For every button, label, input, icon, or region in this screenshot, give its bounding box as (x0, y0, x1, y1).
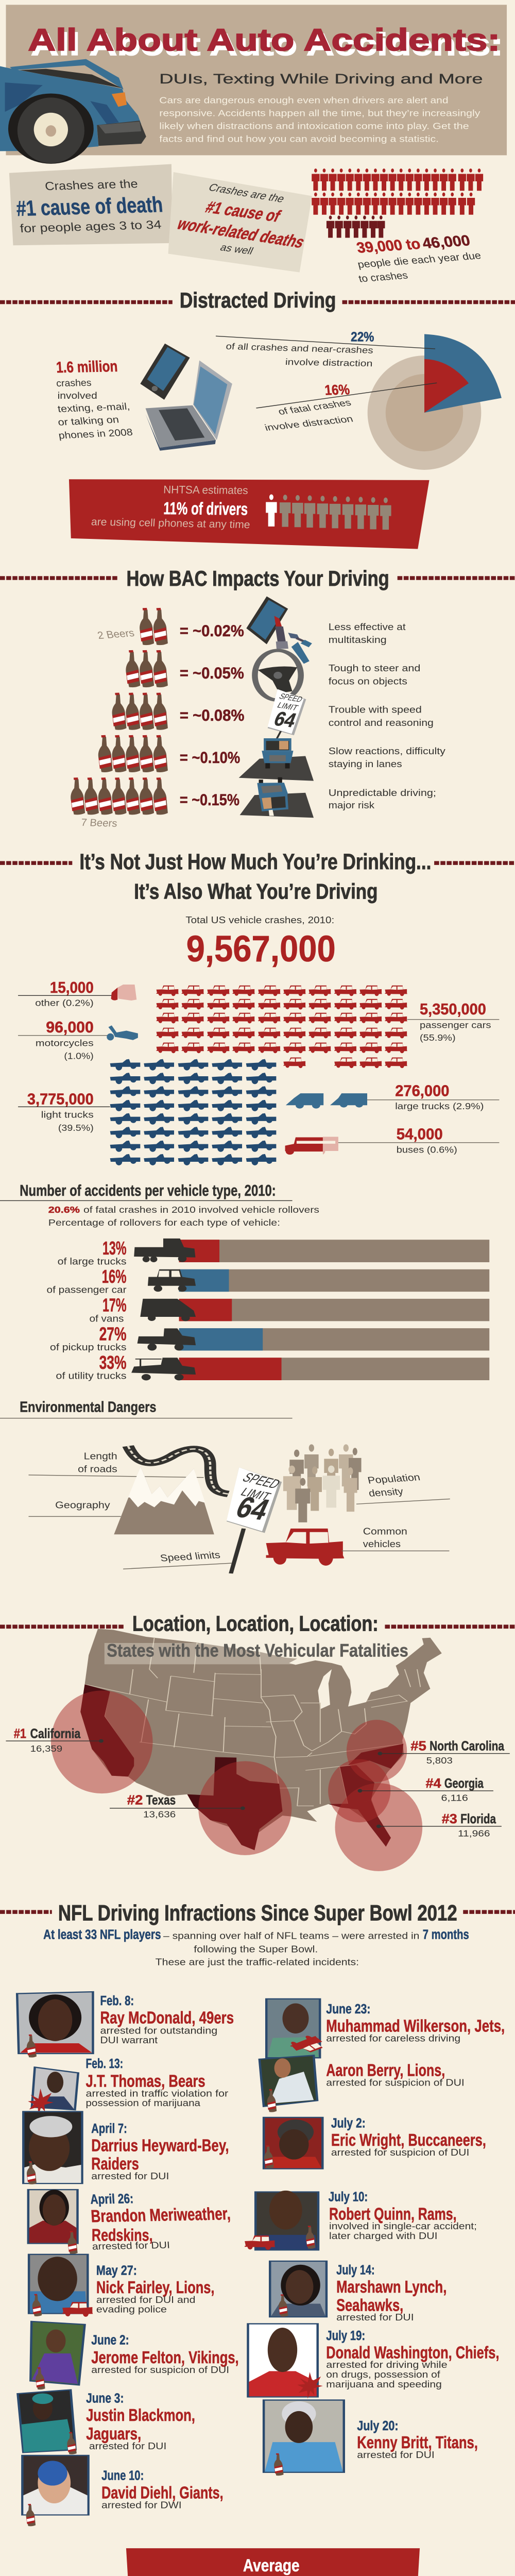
player: Brandon Meriweather (28, 2190, 231, 2254)
effects list: Trouble with speed (329, 704, 422, 715)
section: averages and prevention (0, 2548, 515, 2576)
callout: number one cause of work-related deaths: #1 cause of (203, 198, 284, 225)
player: Justin Blackmon: June 3: (86, 2391, 124, 2406)
BAC values: = ~0.08% (180, 706, 244, 724)
section: vehicle type accidents: 13% (102, 1238, 127, 1259)
player: Jerome Felton: June 2: (91, 2333, 129, 2348)
callout: number one cause of death: for people ages 3 to 34 (20, 218, 162, 235)
callout: average incidents (126, 2548, 420, 2576)
statistic: 22 percent: of all crashes and near-crashes (226, 342, 374, 355)
player: Darrius Heyward-Bey (23, 2112, 229, 2184)
statistic: 16 percent (263, 381, 354, 433)
player: Donald Washington: on drugs, possession of (326, 2369, 440, 2380)
label: Texas: Texas (146, 1793, 176, 1807)
player: Jerome Felton: arrested for suspicion of DUI (91, 2364, 229, 2375)
label: population density (356, 1471, 450, 1504)
label: North Carolina (377, 1739, 510, 1766)
statistic: 1.6 million: or talking on (57, 414, 119, 428)
player: Darrius Heyward-Bey: arrested for DUI (91, 2171, 169, 2181)
chart: distraction radial pie (216, 334, 502, 470)
label: California: 16,359 (30, 1743, 62, 1754)
icon: speed limit sign: LIMIT (238, 1485, 274, 1503)
player: Donald Washington: marijuana and speeding (326, 2379, 442, 2389)
section: NFL players part two: Justin Blackmon, (86, 2405, 195, 2425)
player: Ray McDonald (17, 1992, 234, 2058)
section: vehicle type accidents (0, 1125, 499, 1381)
statistic: 16 percent: involve distraction (263, 414, 354, 433)
section: header banner: #1 cause of death (15, 193, 164, 221)
label: common vehicles (341, 1526, 449, 1551)
player: Donald Washington (248, 2324, 499, 2399)
player: Donald Washington: arrested for driving while (326, 2359, 448, 2370)
panel: header background (6, 5, 507, 155)
player: Brandon Meriweather: Redskins, (92, 2225, 153, 2245)
player: Kenny Britt: arrested for DUI (357, 2449, 435, 2460)
section: vehicle type accidents: 27% (99, 1324, 127, 1345)
icon: tablet (140, 344, 190, 400)
BAC values (180, 621, 244, 809)
statistic: annual deaths (355, 232, 482, 284)
player: Eric Wright (264, 2116, 486, 2168)
label: passenger cars (407, 1000, 499, 1043)
section: NFL players part two: David Diehl, Giants, (101, 2483, 224, 2502)
map: United States (80, 1629, 442, 1850)
player: Robert Quinn: later charged with DUI (329, 2230, 437, 2241)
icon: laptop (146, 360, 232, 451)
player: Ray McDonald: DUI warrant (100, 2035, 158, 2045)
banner: cell phone use: NHTSA estimates (163, 483, 248, 497)
player: Ray McDonald: Feb. 8: (100, 1993, 134, 2008)
icon: red car (266, 1529, 344, 1566)
player: Darrius Heyward-Bey: Raiders (91, 2154, 139, 2174)
player: Aaron Berry (260, 2055, 465, 2112)
label: motorcycles: motorcycles (36, 1038, 94, 1048)
statistic: annual deaths: 39,000 to (355, 235, 422, 256)
section: NFL players part one: J.T. Thomas, Bears (85, 2071, 205, 2091)
subheading: environmental dangers: Environmental Dangers (20, 1399, 157, 1415)
section: NFL players part two (18, 2255, 499, 2526)
label: population density: Population (367, 1471, 421, 1486)
label: common vehicles: Common (363, 1526, 407, 1536)
statistic: 1.6 million: 1.6 million (56, 357, 118, 376)
section: NFL players part one: Brandon Meriweather, (90, 2204, 231, 2226)
statistic: 1.6 million: phones in 2008 (58, 427, 133, 441)
player: Kenny Britt: July 20: (357, 2418, 399, 2433)
label: large trucks (286, 1081, 499, 1111)
player: Robert Quinn (245, 2190, 477, 2250)
player: Justin Blackmon: Jaguars, (86, 2424, 141, 2443)
effects list: control and reasoning (329, 717, 434, 728)
label: other vehicles: 15,000 (50, 978, 94, 996)
label: Texas (110, 1793, 245, 1820)
BAC values: = ~0.05% (180, 664, 244, 682)
section: NFL players part two: Jerome Felton, Vikings, (91, 2348, 239, 2367)
text: rollovers intro: Percentage of rollovers for each type of vehicle: (48, 1217, 280, 1228)
icon: speed limit sign: 64 (231, 1490, 274, 1526)
section: header banner (0, 5, 507, 284)
label: large trucks: 276,000 (395, 1081, 449, 1099)
label: Texas: #2 (127, 1793, 143, 1807)
player: David Diehl: arrested for DWI (101, 2500, 182, 2511)
icon: speed limit sign: 64 (271, 708, 299, 732)
BAC values: = ~0.10% (180, 748, 240, 767)
player: Muhammad Wilkerson (266, 1999, 505, 2058)
label: California (6, 1726, 104, 1754)
section: what you are driving: 9,567,000 (186, 928, 336, 970)
icon: speed limit sign (227, 1467, 284, 1573)
label: other vehicles: other (0.2%) (35, 997, 94, 1008)
callout: number one cause of work-related deaths: as well (218, 242, 255, 257)
callout: number one cause of work-related deaths (168, 172, 312, 273)
label: buses: buses (0.6%) (397, 1144, 457, 1155)
player: Brandon Meriweather: April 26: (90, 2191, 134, 2207)
effects list (329, 621, 445, 810)
icon: crashed blue car (0, 59, 146, 164)
player: David Diehl: June 10: (101, 2468, 144, 2483)
player: Eric Wright: July 2: (331, 2116, 366, 2131)
BAC values: = ~0.02% (180, 621, 244, 640)
icon: speed limit sign: LIMIT (276, 701, 300, 713)
icons: vehicle silhouettes (131, 1239, 196, 1380)
icon: speed limit sign (268, 689, 306, 739)
player: Ray McDonald: arrested for outstanding (100, 2025, 217, 2036)
player: J.T. Thomas (28, 2056, 228, 2115)
statistic: 16 percent: of fatal crashes (277, 398, 353, 417)
label: speed limits (123, 1549, 232, 1569)
subheading: states with most fatalities (105, 1641, 408, 1664)
label: light trucks: light trucks (41, 1110, 94, 1120)
bar labels: of passenger car (47, 1284, 127, 1295)
label: buses (285, 1125, 499, 1155)
text: NFL intro: These are just the traffic-related incidents: (156, 1957, 359, 1967)
player: Nick Fairley: evading police (96, 2304, 167, 2315)
label: passenger cars: (55.9%) (420, 1032, 456, 1043)
statistic: 1.6 million (56, 357, 133, 441)
player: Robert Quinn: July 10: (329, 2190, 368, 2205)
player: Donald Washington: July 19: (326, 2328, 365, 2343)
statistic: 1.6 million: crashes (56, 377, 92, 388)
label: common vehicles: vehicles (363, 1538, 401, 1549)
icon: mountains (114, 1466, 214, 1534)
icon rows: beer bottles (71, 608, 168, 815)
statistic: 1.6 million: involved (58, 390, 97, 401)
player: Brandon Meriweather: arrested for DUI (92, 2240, 170, 2252)
section: vehicle type accidents: 16% (102, 1266, 127, 1287)
player: J.T. Thomas: possession of marijuana (85, 2097, 200, 2108)
label: Florida: #3 (442, 1812, 457, 1826)
player: J.T. Thomas: arrested in traffic violation for (85, 2088, 228, 2098)
section: environmental dangers (0, 1399, 450, 1573)
player: Nick Fairley: arrested for DUI and (96, 2294, 195, 2305)
map: state circles (51, 1690, 422, 1871)
pictogram: people killed each year (312, 168, 483, 238)
section: NFL players part one (17, 1992, 505, 2254)
effects list: Tough to steer and (329, 663, 420, 673)
section: vehicle type accidents: 33% (99, 1352, 127, 1373)
statistic: annual deaths: 46,000 (421, 232, 472, 252)
BAC values: = ~0.15% (180, 790, 239, 809)
label: California: California (30, 1726, 81, 1741)
label: light trucks: 3,775,000 (27, 1090, 94, 1108)
label: light trucks (18, 1090, 110, 1133)
label: length of roads: Length (84, 1451, 117, 1462)
section: distracted driving (0, 289, 515, 549)
intro paragraph (159, 95, 480, 144)
callout: number one cause of death (9, 164, 173, 245)
section: NFL players part one: Ray McDonald, 49ers (100, 2008, 234, 2027)
callout: average incidents: Average (243, 2555, 300, 2575)
label: length of roads (78, 1451, 117, 1475)
statistic: annual deaths: to crashes (357, 270, 409, 284)
player: Justin Blackmon (18, 2390, 195, 2454)
text: rollovers intro: 20.6% (48, 1205, 80, 1215)
text: rollovers intro: of fatal crashes in 2010 involved vehicle rollovers (83, 1205, 319, 1215)
statistic: 22 percent: involve distraction (285, 357, 373, 368)
effects list: multitasking (329, 634, 387, 645)
label: California: #1 (14, 1726, 26, 1741)
icon: crowd of people (283, 1444, 362, 1522)
label: motorcycles (18, 1018, 138, 1061)
label: motorcycles: (1.0%) (64, 1051, 94, 1061)
bar labels: of vans (89, 1313, 124, 1324)
label: Georgia (358, 1776, 493, 1803)
bar chart: rollovers by vehicle (179, 1240, 489, 1380)
callout: number one cause of work-related deaths: Crashes are the (207, 181, 287, 205)
section: BAC impact (0, 567, 515, 829)
statistic: 1.6 million: texting, e-mail, (57, 401, 130, 414)
banner: cell phone use: are using cell phones at any time (91, 516, 250, 531)
player: Justin Blackmon: arrested for DUI (89, 2441, 166, 2451)
effects list: staying in lanes (329, 758, 402, 769)
label: 2 beers: 2 Beers (96, 627, 135, 641)
section: what you are driving (0, 849, 515, 1165)
section: distracted driving: Distracted Driving (180, 289, 336, 312)
effects list: Unpredictable driving; (329, 787, 436, 798)
label: speed limits: Speed limits (159, 1549, 221, 1564)
label: North Carolina: #5 (410, 1739, 426, 1754)
label: other vehicles (18, 978, 136, 1008)
bar labels: of utility trucks (56, 1370, 127, 1381)
map: highlighted states (80, 1684, 403, 1850)
icon: speed limit sign: SPEED (239, 1470, 284, 1492)
section: NFL players part one: Darrius Heyward-Bey, (91, 2136, 229, 2155)
effects list: focus on objects (329, 676, 407, 687)
label: population density: density (368, 1486, 404, 1499)
effects list: major risk (329, 800, 374, 810)
bar labels: of large trucks (58, 1256, 127, 1266)
section: vehicle type accidents: 17% (102, 1295, 127, 1316)
label: light trucks: (39.5%) (58, 1123, 94, 1133)
section: header banner: work-related deaths (174, 214, 308, 251)
player: Marshawn Lynch: July 14: (336, 2263, 375, 2278)
player: Jerome Felton (30, 2321, 239, 2389)
text: rollovers intro (48, 1205, 319, 1228)
player: J.T. Thomas: Feb. 13: (85, 2056, 123, 2071)
label: North Carolina: 5,803 (426, 1755, 453, 1766)
label: Florida: 11,966 (458, 1828, 490, 1838)
label: Georgia: 6,116 (441, 1792, 468, 1803)
icon: winding road (128, 1446, 228, 1494)
label: buses: 54,000 (397, 1125, 443, 1143)
bar labels (47, 1238, 127, 1381)
section: NFL players part two: Nick Fairley, Lions, (96, 2278, 214, 2297)
icon: steering wheel (255, 651, 301, 700)
effects list: Less effective at (329, 621, 406, 632)
player: Nick Fairley (29, 2255, 214, 2317)
bar labels: of pickup trucks (50, 1342, 127, 1352)
text: NFL intro: following the Super Bowl. (194, 1944, 318, 1955)
callout: number one cause of death: Crashes are the (44, 177, 139, 193)
label: total crashes: Total US vehicle crashes, 2010: (185, 914, 334, 925)
label: Florida (376, 1812, 502, 1838)
section: distracted driving: 22% (351, 329, 374, 344)
text: NFL intro: At least 33 NFL players (43, 1927, 161, 1942)
player: Muhammad Wilkerson: June 23: (326, 2002, 370, 2016)
statistic: 22 percent (226, 329, 374, 368)
player: David Diehl (22, 2455, 224, 2526)
icon: truck on road (239, 738, 314, 781)
player: Darrius Heyward-Bey: April 7: (91, 2121, 127, 2136)
label: 7 beers: 7 Beers (80, 817, 118, 829)
pictogram: passenger cars (157, 986, 407, 1068)
pictogram: light trucks (110, 1059, 276, 1165)
icon: tablet and cosmetics (246, 596, 312, 664)
label: length of roads: of roads (78, 1464, 117, 1475)
text: NFL intro (43, 1927, 469, 1967)
statistic: 16 percent: 16% (324, 381, 350, 398)
player: Marshawn Lynch (270, 2261, 447, 2323)
player: Nick Fairley: May 27: (96, 2263, 137, 2278)
section: location map (0, 1612, 515, 1967)
label: geography: Geography (55, 1499, 110, 1510)
label: Texas: 13,636 (143, 1809, 176, 1820)
effects list: Slow reactions, difficulty (329, 745, 445, 756)
player: Marshawn Lynch: arrested for DUI (336, 2312, 414, 2323)
banner: cell phone use (69, 479, 430, 549)
label: Georgia: #4 (426, 1776, 441, 1791)
icon: flipped truck on road (240, 777, 314, 818)
player: Kenny Britt (264, 2400, 478, 2476)
banner: cell phone use: 11% of drivers (163, 499, 248, 519)
label: motorcycles: 96,000 (46, 1018, 94, 1036)
icon: speed limit sign: SPEED (278, 692, 304, 704)
player: Marshawn Lynch: Seahawks, (336, 2295, 403, 2315)
